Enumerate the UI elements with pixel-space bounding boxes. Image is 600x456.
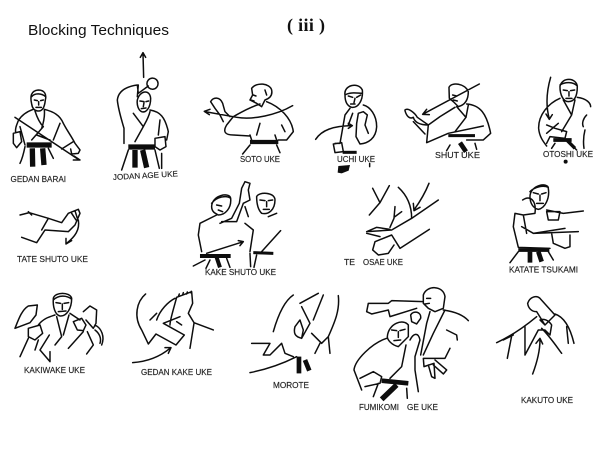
figure: shuto uke: [405, 84, 491, 160]
title: Blocking Techniques: [28, 22, 169, 39]
section number: ( iii ): [287, 15, 325, 36]
figure: fumikomi age uke: GE UKE: [407, 403, 438, 412]
figure: kakiwake uke: KAKIWAKE UKE: [24, 366, 85, 375]
figure: jodan age uke: [113, 53, 178, 182]
figure: kakuto uke: KAKUTO UKE: [521, 396, 573, 405]
figure: gedan barai: [10, 90, 80, 184]
figure: gedan kake uke: GEDAN KAKE UKE: [141, 368, 212, 377]
figure: kake shuto uke: KAKE SHUTO UKE: [205, 268, 276, 277]
figure: kakiwake uke: [15, 293, 103, 375]
figure: te osae uke: OSAE UKE: [363, 258, 403, 267]
figure: soto uke: SOTO UKE: [240, 155, 280, 164]
figure: soto uke: [204, 84, 293, 164]
figure: morote: MOROTE: [273, 381, 309, 390]
figure: katate tsukami: KATATE TSUKAMI: [509, 266, 578, 274]
figure: tate shuto uke: TATE SHUTO UKE: [17, 255, 88, 264]
figure: morote: [250, 293, 339, 390]
figure: otoshi uke: [539, 77, 593, 164]
figure: te osae uke: TE: [344, 258, 355, 267]
figure: otoshi uke: OTOSHI UKE: [543, 150, 593, 159]
figure: kake shuto uke: [193, 182, 281, 277]
figure: uchi uke: [316, 85, 377, 173]
figure: te osae uke: [344, 183, 438, 267]
figure: katate tsukami: [509, 185, 583, 274]
figure: kakuto uke: [497, 297, 574, 405]
figure: fumikomi age uke: FUMIKOMI: [359, 403, 399, 412]
figure: uchi uke: UCHI UKE: [337, 155, 375, 164]
figure: jodan age uke: JODAN AGE UKE: [113, 169, 178, 182]
figure: fumikomi age uke: [354, 288, 468, 412]
figure: tate shuto uke: [17, 209, 88, 264]
figure: gedan barai: GEDAN BARAI: [10, 175, 66, 184]
figure: shuto uke: UKE: [461, 151, 480, 160]
figure: gedan kake uke: [133, 291, 213, 377]
figure: shuto uke: SHUT: [435, 151, 459, 160]
